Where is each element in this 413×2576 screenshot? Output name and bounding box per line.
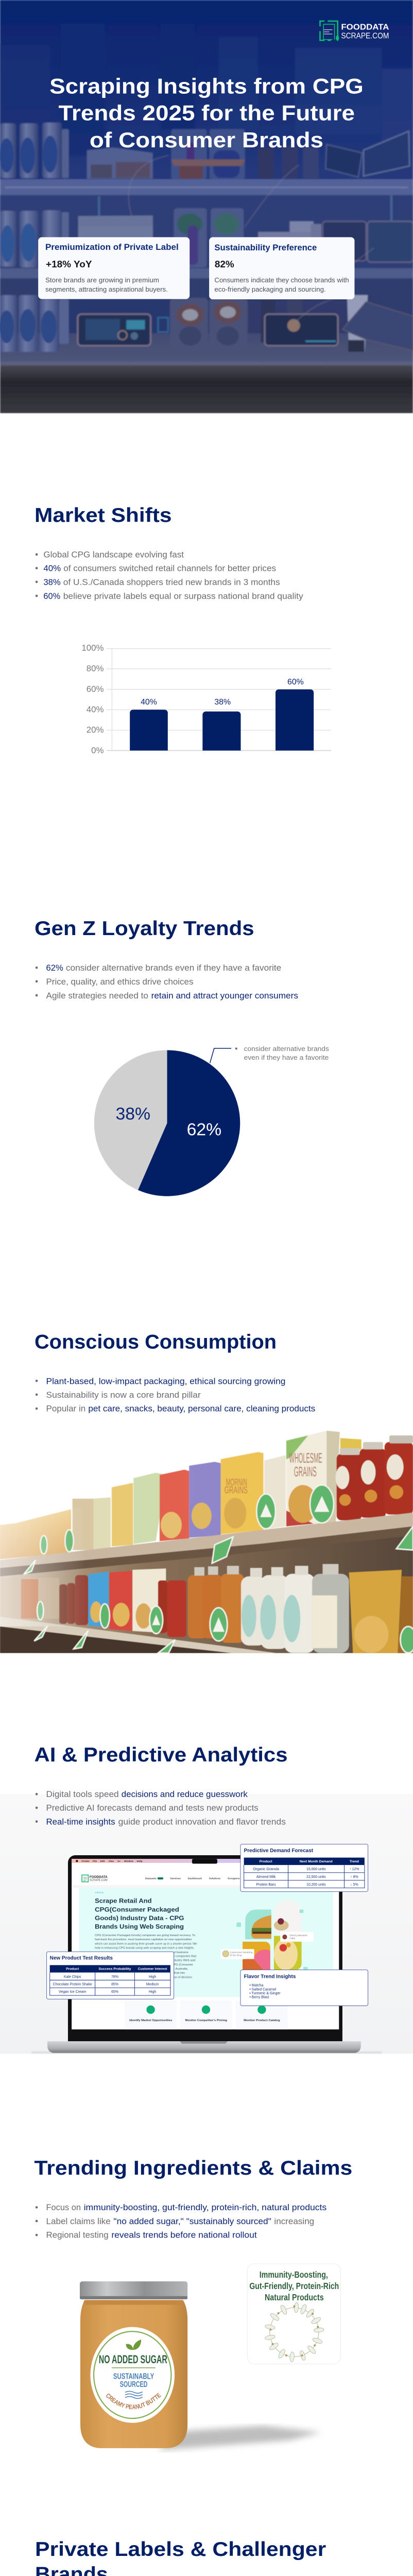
food chip: wedding — [221, 1949, 254, 1959]
site nav: Services — [170, 1877, 181, 1880]
table: predictive demand forecast: Trend — [350, 1860, 359, 1863]
website hero text: PG (Consumer — [174, 1963, 193, 1967]
website hero text: Brands Using Web Scraping — [95, 1923, 184, 1930]
bullet list: reveals trends before national rollout — [111, 2231, 257, 2240]
card: sustainability: eco-friendly packaging and sourcing. — [214, 285, 326, 293]
panel: flavor trend insights: • Salted Caramel — [249, 1988, 277, 1991]
jar label: SUSTAINABLY — [113, 2372, 154, 2381]
bullet list: believe private labels equal or surpass national brand quality — [63, 592, 304, 601]
bar chart: 100% — [81, 643, 104, 653]
bullet list: decisions and reduce guesswork — [122, 1790, 248, 1799]
logo: FoodData Scrape: SCRAPE.COM — [341, 32, 389, 41]
website hero text: on of decision — [174, 1976, 192, 1979]
table: new product test results: Vegan Ice Cream — [59, 1990, 87, 1994]
logo: FoodData Scrape: FOODDATA — [341, 23, 389, 31]
grocery shelf photo: GRAINS — [225, 1485, 248, 1496]
table: new product test results: Customer Interest — [138, 1967, 167, 1971]
table: predictive demand forecast: Product — [260, 1860, 272, 1863]
site nav: Dashboard — [188, 1877, 202, 1880]
grocery shelf photo: MORNIN — [226, 1477, 247, 1488]
menu bar text: View — [109, 1860, 114, 1862]
bullet list: Label claims like — [46, 2217, 111, 2226]
card: sustainability: 82% — [215, 259, 234, 269]
pie chart: 62% — [187, 1120, 221, 1140]
menu bar text: File — [93, 1860, 97, 1862]
jar label — [90, 2327, 175, 2423]
website hero text: fast-track the procedure, most businesses capitalize on new opportunities — [95, 1938, 192, 1941]
jar label: SOURCED — [120, 2380, 147, 2389]
menu bar text: Window — [124, 1860, 133, 1862]
food chip: wedding: Bi Be Bing — [230, 1954, 242, 1956]
claims card: Gut-Friendly, Protein-Rich — [249, 2281, 339, 2291]
bullet list: consider alternative brands even if they have a favorite — [66, 963, 281, 973]
card: sustainability: Sustainability Preference — [214, 243, 317, 252]
website hero text: that into — [174, 1972, 185, 1975]
bar: 38%: 38% — [214, 698, 231, 707]
bullet list: "no added sugar," "sustainably sourced" — [113, 2217, 271, 2226]
bullet list — [36, 2203, 326, 2240]
jar label: NO ADDED SUGAR — [99, 2353, 167, 2366]
service cards: Identify Market Opportunities — [129, 2019, 173, 2022]
heading: AI & Predictive Analytics — [34, 1744, 288, 1766]
peanut butter jar — [80, 2281, 187, 2448]
bullet list — [36, 1790, 286, 1827]
title: Scraping Insights from CPG — [49, 74, 364, 98]
section: conscious consumption — [0, 1331, 413, 1653]
table: new product test results: Medium — [146, 1983, 159, 1987]
website hero text: dustry Web and — [174, 1959, 196, 1962]
bullet list — [36, 550, 304, 601]
table: new product test results: 85% — [111, 1983, 118, 1987]
card: premiumization: Premiumization of Private Label — [45, 242, 179, 252]
table: predictive demand forecast: Organic Granola — [253, 1868, 279, 1871]
table: new product test results: New Product Test Results — [50, 1956, 113, 1961]
bullet list: increasing — [274, 2217, 314, 2226]
food chip: macaron: Cake — [289, 1937, 296, 1940]
website hero text: Goods) Industry Data - CPG — [95, 1914, 184, 1922]
food chip: macaron — [280, 1932, 314, 1942]
website hero text: , Australia, — [174, 1968, 188, 1971]
website hero text: CPGS — [95, 1891, 104, 1894]
bullet list: 40% — [43, 564, 61, 573]
bullet list: Regional testing — [46, 2231, 109, 2240]
bullet list — [36, 963, 298, 1001]
pie chart: 38% — [116, 1104, 150, 1124]
jar label: CREAMY PEANUT BUTTER — [106, 2393, 161, 2409]
table: new product test results: 78% — [111, 1975, 118, 1979]
bullet list: Price, quality, and ethics drive choices — [46, 977, 193, 987]
bullet list: Predictive AI forecasts demand and tests new products — [46, 1804, 259, 1813]
panel: flavor trend insights: • Matcha — [249, 1984, 263, 1988]
laptop — [31, 1855, 382, 2054]
section: private labels — [0, 2538, 413, 2576]
table: predictive demand forecast: Predictive Demand Forecast — [244, 1848, 314, 1854]
food chip: wedding: Cantonese Wedding — [230, 1951, 253, 1954]
website hero text: CPG (Consumer Packaged Goods) companies are going toward recovery. To — [95, 1934, 195, 1937]
callout — [210, 1045, 329, 1063]
section: trending ingredients — [34, 2157, 352, 2453]
table: new product test results: Kale Chips — [64, 1975, 81, 1979]
callout: consider alternative brands — [244, 1045, 329, 1053]
bullet list: guide product innovation and flavor trends — [118, 1818, 286, 1827]
bullet list: of consumers switched retail channels for better prices — [63, 564, 276, 573]
website hero text: CPG(Consumer Packaged — [95, 1906, 179, 1913]
menu bar text: Help — [136, 1860, 143, 1862]
bullet list: of U.S./Canada shoppers tried new brands in 3 months — [63, 578, 280, 587]
table: predictive demand forecast — [240, 1844, 368, 1892]
menu bar text: Edit — [100, 1860, 105, 1862]
section: ai and predictive analytics — [0, 1744, 413, 2054]
menu bar text: Go — [117, 1860, 121, 1862]
hero panel — [0, 0, 413, 413]
bar: 60% — [276, 677, 314, 751]
grey backdrop — [0, 1794, 413, 2054]
title — [49, 74, 364, 152]
table: new product test results: High — [149, 1975, 156, 1979]
bar: 40% — [130, 698, 168, 751]
bar: 60%: 60% — [287, 677, 304, 686]
bar chart: 80% — [87, 664, 104, 673]
logo: FoodData Scrape — [320, 21, 389, 41]
title: of Consumer Brands — [90, 128, 323, 152]
claims card: Natural Products — [265, 2292, 324, 2302]
bar chart: 0% — [91, 745, 104, 755]
table: predictive demand forecast: 15,000 units — [306, 1868, 326, 1871]
card: premiumization — [38, 237, 190, 299]
claims card — [247, 2264, 340, 2364]
table: predictive demand forecast: ↓ 5% — [350, 1883, 358, 1887]
service cards — [125, 2001, 288, 2029]
heading: Gen Z Loyalty Trends — [35, 918, 254, 940]
grocery shelf photo: WHOLESME — [289, 1450, 322, 1466]
heading: Market Shifts — [35, 504, 171, 527]
website hero text: which can assist them in pushing their growth curve up in a shorter period. We — [94, 1942, 197, 1945]
bullet list: Global CPG landscape evolving fast — [43, 550, 184, 560]
section: gen z — [35, 918, 329, 1196]
site nav: Scrapers — [228, 1877, 240, 1880]
bullet list: immunity-boosting, gut-friendly, protein-rich, natural products — [84, 2203, 326, 2212]
table: new product test results: 65% — [111, 1990, 118, 1994]
menu bar text — [76, 1860, 143, 1862]
website hero text: l companies that — [174, 1955, 197, 1958]
wreath icon — [265, 2302, 324, 2362]
site nav: Solutions — [209, 1877, 220, 1880]
table: predictive demand forecast: ↑ 8% — [350, 1875, 358, 1879]
table: predictive demand forecast: Next Month Demand — [300, 1860, 333, 1863]
bullet list: 62% — [46, 963, 63, 973]
table: predictive demand forecast: 10,200 units — [306, 1883, 326, 1887]
bullet list: Popular in — [46, 1404, 85, 1414]
claims card: Immunity-Boosting, — [260, 2269, 328, 2280]
heading: Conscious Consumption — [35, 1331, 277, 1353]
service cards: Monitor Competitor's Pricing — [185, 2019, 227, 2022]
pie chart — [94, 1050, 240, 1196]
service cards: Monitor Product Catalog — [244, 2019, 280, 2022]
card: sustainability — [209, 237, 354, 299]
grocery shelf photo — [0, 1431, 413, 1653]
bullet list: pet care, snacks, beauty, personal care, cleaning products — [88, 1404, 315, 1414]
bullet list: Digital tools speed — [46, 1790, 119, 1799]
bullet list — [36, 1377, 315, 1414]
bar chart: 20% — [87, 725, 104, 735]
site nav: Datasets — [145, 1877, 157, 1880]
site nav — [82, 1875, 240, 1882]
website hero text: help in enhancing CPG brands using web scraping and reach a new heights. — [95, 1947, 194, 1950]
bullet list: Plant-based, low-impact packaging, ethical sourcing growing — [46, 1377, 285, 1386]
bullet list: 38% — [43, 578, 61, 587]
table: new product test results: Product — [66, 1967, 79, 1971]
table: predictive demand forecast: 22,500 units — [306, 1875, 326, 1879]
panel: flavor trend insights: • Berry Blast — [249, 1996, 269, 1999]
bullet list: 60% — [43, 592, 60, 601]
bar chart: 40% — [87, 705, 104, 715]
bullet list: Agile strategies needed to — [46, 991, 148, 1001]
bullet list: Sustainability is now a core brand pillar — [46, 1391, 201, 1400]
bullet list: Focus on — [46, 2203, 81, 2212]
table: predictive demand forecast: ↑ 12% — [349, 1868, 359, 1871]
table: new product test results: Success Probability — [99, 1967, 131, 1971]
table: new product test results: Chocolate Protein Shake — [53, 1983, 92, 1987]
title: Trends 2025 for the Future — [59, 101, 355, 125]
table: predictive demand forecast: Protein Bars — [256, 1883, 276, 1887]
bar: 38% — [202, 698, 240, 751]
panel: flavor trend insights: • Turmeric & Ginger — [249, 1992, 281, 1995]
grocery shelf photo: GRAINS — [294, 1464, 317, 1479]
bullet list: Real-time insights — [46, 1818, 115, 1827]
table: predictive demand forecast: Almond Milk — [256, 1875, 276, 1879]
bullet list: retain and attract younger consumers — [151, 991, 298, 1001]
jar shadow — [158, 2426, 321, 2450]
menu bar text: Finder — [82, 1860, 90, 1862]
table: new product test results — [47, 1952, 174, 1999]
bar chart: 60% — [87, 684, 104, 694]
website food collage — [221, 1901, 314, 1970]
website hero text: d business — [174, 1951, 188, 1954]
panel: flavor trend insights — [240, 1970, 368, 2006]
card: premiumization: +18% YoY — [46, 259, 92, 269]
heading — [35, 2538, 326, 2576]
card: premiumization: segments, attracting aspirational buyers. — [45, 285, 168, 293]
callout: even if they have a favorite — [244, 1054, 329, 1061]
bar: 40%: 40% — [141, 698, 157, 707]
section: market shifts — [35, 504, 331, 755]
website hero text — [94, 1891, 197, 1979]
food chip: macaron: Cherry Macaron — [289, 1934, 307, 1937]
card: sustainability: Consumers indicate they choose brands with — [214, 276, 349, 284]
heading: Trending Ingredients & Claims — [34, 2157, 352, 2179]
hero background photo — [0, 0, 413, 413]
card: premiumization: Store brands are growing in premium — [45, 276, 159, 284]
heading: Private Labels & Challenger — [35, 2538, 326, 2561]
site nav: FOODDATA — [90, 1875, 108, 1879]
site nav: SCRAPE.COM — [90, 1878, 108, 1882]
table: new product test results: High — [149, 1990, 156, 1994]
website hero text: Scrape Retail And — [95, 1897, 152, 1905]
bar chart — [81, 643, 331, 755]
panel: flavor trend insights: Flavor Trend Insights — [244, 1974, 296, 1979]
